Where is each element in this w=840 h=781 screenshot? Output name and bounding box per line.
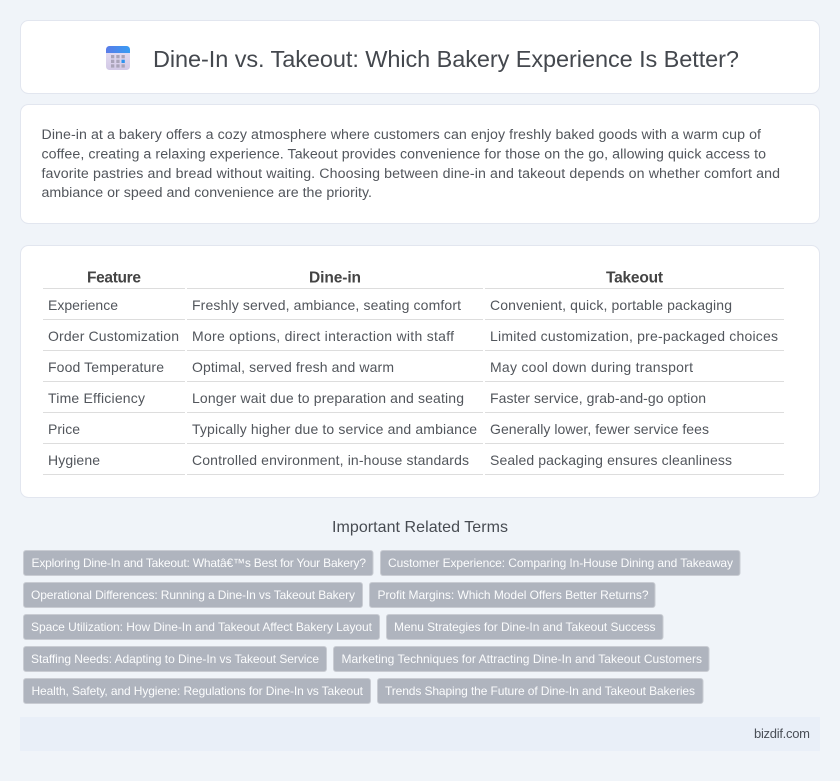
table row: time efficiency: Longer wait due to preparation and seating	[192, 390, 464, 406]
tag	[24, 582, 362, 608]
table row: experience	[43, 297, 784, 320]
table row: food temperature	[43, 359, 784, 382]
table row: time efficiency: Faster service, grab-and-go option	[490, 390, 706, 406]
tag	[386, 614, 663, 640]
tag	[380, 550, 740, 576]
table header row: Feature	[87, 270, 141, 286]
tag	[24, 550, 373, 576]
table row: price: Generally lower, fewer service fees	[490, 421, 709, 437]
tag: Health, Safety, and Hygiene: Regulations for Dine-In vs Takeout	[32, 684, 364, 698]
table header row: Takeout	[606, 270, 663, 286]
table row: hygiene: Sealed packaging ensures cleanliness	[490, 452, 732, 468]
tag	[378, 678, 703, 704]
table row: order customization: More options, direct interaction with staff	[192, 328, 454, 344]
table header row	[43, 270, 784, 289]
table row: price: Typically higher due to service and ambiance	[192, 421, 477, 437]
tag	[24, 678, 370, 704]
tag: Exploring Dine-In and Takeout: Whatâ€™s Best for Your Bakery?	[32, 556, 366, 570]
table row: food temperature: Optimal, served fresh and warm	[192, 359, 394, 375]
title: Dine-In vs. Takeout: Which Bakery Experience Is Better?	[153, 46, 739, 72]
table row: order customization: Order Customization	[48, 328, 179, 344]
tag: Staffing Needs: Adapting to Dine-In vs Takeout Service	[31, 652, 319, 666]
panel: introduction	[20, 104, 820, 224]
text block: introduction paragraph: Dine-in at a bakery offers a cozy atmosphere where customers can enjoy freshly baked goods with a warm cup of	[42, 127, 761, 143]
icon: calendar	[106, 46, 130, 70]
panel: header	[20, 20, 820, 94]
tag: Profit Margins: Which Model Offers Better Returns?	[378, 588, 649, 602]
table row: hygiene: Hygiene	[48, 452, 100, 468]
text block: introduction paragraph	[42, 127, 780, 201]
table row: price: Price	[48, 421, 80, 437]
table row: food temperature: May cool down during transport	[490, 359, 693, 375]
tag: Menu Strategies for Dine-In and Takeout Success	[394, 620, 656, 634]
tag: Space Utilization: How Dine-In and Takeout Affect Bakery Layout	[31, 620, 373, 634]
table row: time efficiency: Time Efficiency	[48, 390, 145, 406]
panel: comparison table	[20, 246, 820, 498]
table header row: Dine-in	[309, 270, 361, 286]
tag	[334, 646, 709, 672]
table row: experience: Convenient, quick, portable packaging	[490, 297, 732, 313]
tag: Marketing Techniques for Attracting Dine-In and Takeout Customers	[342, 652, 702, 666]
tag: Operational Differences: Running a Dine-In vs Takeout Bakery	[31, 588, 355, 602]
table row: time efficiency	[43, 390, 784, 413]
panel: related term tags	[24, 550, 740, 704]
table row: order customization	[43, 328, 784, 351]
tag	[370, 582, 655, 608]
tag: Customer Experience: Comparing In-House Dining and Takeaway	[388, 556, 733, 570]
heading: related terms: Important Related Terms	[332, 519, 508, 536]
footer site name: bizdif.com	[754, 726, 810, 741]
table row: order customization: Limited customization, pre-packaged choices	[490, 328, 778, 344]
table row: food temperature: Food Temperature	[48, 359, 164, 375]
text block: introduction paragraph: coffee, creating a relaxing experience. Takeout provides convenience for those on the go, allowing quick access to	[42, 146, 766, 162]
table row: price	[43, 421, 784, 444]
table row: hygiene: Controlled environment, in-house standards	[192, 452, 469, 468]
tag: Trends Shaping the Future of Dine-In and Takeout Bakeries	[385, 684, 695, 698]
tag	[24, 646, 326, 672]
text block: introduction paragraph: ambiance or speed and convenience are the priority.	[42, 185, 372, 201]
footer	[20, 717, 820, 751]
table row: experience: Freshly served, ambiance, seating comfort	[192, 297, 461, 313]
table row: hygiene	[43, 452, 784, 475]
table row: experience: Experience	[48, 297, 118, 313]
text block: introduction paragraph: favorite pastries and bread without waiting. Choosing between dine-in and takeout depends on whether comfort and	[42, 166, 780, 182]
tag	[24, 614, 380, 640]
